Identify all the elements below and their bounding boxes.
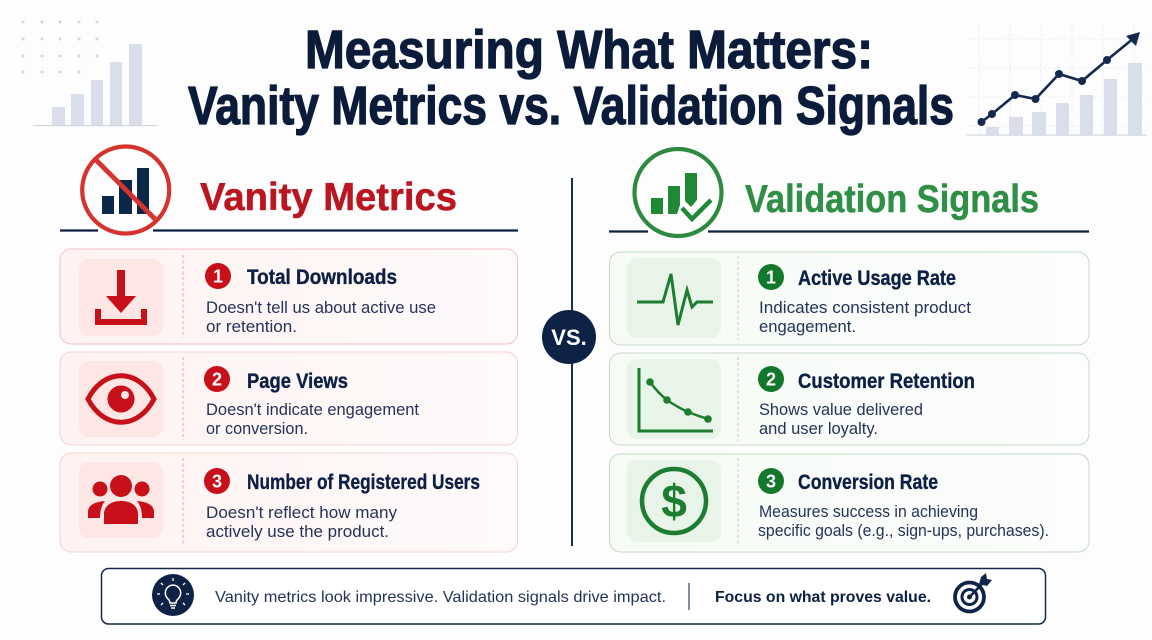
panel: validation card 1: [610, 252, 1089, 345]
badge 1: 1: [766, 268, 776, 288]
panel: validation card 3: [610, 454, 1089, 552]
badge 3: 3: [766, 472, 776, 492]
icon: download: [95, 270, 147, 325]
vs badge: [542, 310, 596, 364]
icon: dollar coin: [642, 469, 706, 533]
icon: crossed-out bar chart: [82, 146, 169, 234]
card description: or conversion.: [206, 420, 308, 438]
card heading: Page Views: [247, 370, 348, 393]
card description: Doesn't tell us about active use: [206, 299, 436, 317]
icon: retention curve: [639, 368, 713, 431]
takeaway text: Vanity metrics look impressive. Validation signals drive impact.: [215, 589, 666, 606]
icon: dollar coin: $: [661, 475, 687, 527]
card description: [206, 299, 436, 336]
center divider: [571, 178, 573, 546]
title: [188, 20, 954, 136]
card heading: Total Downloads: [247, 266, 397, 289]
card heading: Conversion Rate: [798, 471, 938, 494]
card description: specific goals (e.g., sign-ups, purchases).: [758, 522, 1049, 540]
card heading: Active Usage Rate: [798, 267, 956, 290]
icon: target: [955, 573, 992, 612]
card description: and user loyalty.: [759, 420, 878, 438]
decorative line chart, top right: [966, 24, 1147, 136]
badge 1: [758, 264, 784, 290]
card description: actively use the product.: [206, 523, 389, 541]
card description: [206, 504, 398, 541]
heading: validation signals: Validation Signals: [745, 178, 1039, 221]
badge 3: [758, 468, 784, 494]
validation signals header rule: [609, 230, 1089, 233]
panel: validation card 2: [610, 353, 1089, 445]
badge 1: [205, 263, 231, 289]
callout: takeaway bar: [102, 568, 1046, 624]
card description: Indicates consistent product: [759, 299, 971, 317]
card description: Shows value delivered: [759, 401, 923, 419]
panel: vanity card 3: [60, 453, 518, 552]
title: Vanity Metrics vs. Validation Signals: [188, 76, 954, 136]
card description: Doesn't indicate engagement: [206, 401, 419, 419]
card description: or retention.: [206, 318, 297, 336]
icon: eye: [88, 376, 154, 422]
badge 1: 1: [213, 266, 223, 286]
icon: pulse: [637, 274, 713, 325]
card description: [206, 401, 419, 438]
badge 3: 3: [212, 472, 222, 492]
title: Measuring What Matters:: [305, 20, 873, 80]
card description: Measures success in achieving: [759, 503, 978, 521]
badge 2: [758, 366, 784, 392]
badge 2: 2: [766, 370, 776, 390]
badge 2: [204, 366, 230, 392]
heading: vanity metrics: Vanity Metrics: [200, 176, 457, 219]
card heading: Customer Retention: [798, 370, 975, 393]
card description: [758, 503, 1049, 540]
card heading: Number of Registered Users: [247, 471, 480, 494]
panel: vanity card 2: [60, 352, 518, 445]
vs badge: VS.: [551, 325, 587, 350]
decorative bar chart, top left: [22, 20, 157, 126]
card description: engagement.: [759, 318, 856, 336]
panel: vanity card 1: [60, 249, 518, 344]
vanity metrics header rule: [60, 229, 518, 232]
badge 3: [204, 468, 230, 494]
emphasis text: Focus on what proves value.: [715, 589, 931, 606]
icon: light bulb: [152, 574, 194, 616]
badge 2: 2: [212, 370, 222, 390]
icon: users: [88, 475, 154, 524]
icon: bar chart with check: [634, 149, 722, 236]
card description: [759, 299, 971, 336]
card description: Doesn't reflect how many: [206, 504, 398, 522]
card description: [759, 401, 923, 438]
